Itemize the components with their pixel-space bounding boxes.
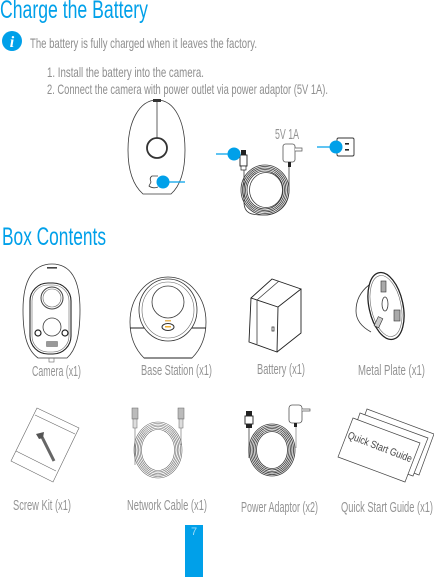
quick start guide illustration: [338, 409, 434, 482]
camera illustration: [23, 264, 80, 362]
page number tab: [185, 525, 203, 577]
instructions list: [47, 64, 328, 97]
voltage label: 5V 1A: [275, 127, 299, 143]
wall outlet with connector dot: [317, 138, 354, 156]
screw kit illustration: [11, 408, 79, 482]
note text: The battery is fully charged when it leaves the factory.: [30, 35, 257, 51]
label: battery: Battery (x1): [257, 362, 305, 378]
network cable illustration: [132, 408, 184, 478]
power adaptor with cable: [216, 144, 302, 215]
label: power adaptor: Power Adaptor (x2): [241, 500, 318, 516]
heading: box contents: Box Contents: [2, 223, 106, 251]
label: base station: Base Station (x1): [141, 363, 212, 379]
metal plate illustration: [356, 269, 410, 343]
quick start guide illustration: Quick Start Guide: [346, 430, 414, 465]
label: network cable: Network Cable (x1): [127, 498, 207, 514]
battery illustration: [249, 279, 301, 352]
page number tab: 7: [191, 526, 197, 538]
label: camera: Camera (x1): [32, 364, 81, 380]
base station illustration: [130, 277, 206, 358]
label: screw kit: Screw Kit (x1): [13, 498, 71, 514]
camera back illustration: [128, 99, 185, 194]
icon: info: [2, 31, 22, 51]
power adaptor illustration: [245, 405, 310, 476]
instructions list: 1. Install the battery into the camera.: [47, 64, 204, 80]
icon: info: i: [10, 34, 15, 51]
